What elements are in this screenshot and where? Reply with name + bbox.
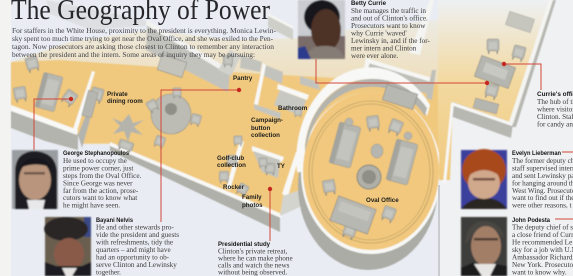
intro text: sky spent too much time trying to get near the Oval Office, and she was exiled to the Pen- xyxy=(12,35,274,43)
walls: Currie's office xyxy=(443,0,556,183)
text: Evelyn Lieberman xyxy=(512,150,573,210)
text: Bayani Nelvis: had an opportunity to ob- xyxy=(96,254,170,262)
photo: Evelyn Lieberman xyxy=(461,149,507,209)
intro text xyxy=(12,27,277,59)
text: George Stephanopoulos: Since George was never xyxy=(63,180,133,188)
Currie's office furniture xyxy=(473,11,535,114)
dining table and plant xyxy=(112,88,242,153)
text: Presidential study xyxy=(218,241,293,276)
text: Betty Currie: were ever alone. xyxy=(351,52,398,60)
photo: John Podesta xyxy=(461,217,507,276)
text: George Stephanopoulos xyxy=(63,150,142,210)
rug xyxy=(357,165,381,189)
text: Evelyn Lieberman: Evelyn Lieberman xyxy=(512,150,561,157)
intro text: For staffers in the White House, proximity to the president is everything. Monica Lewin- xyxy=(12,27,277,35)
text: George Stephanopoulos: George Stephanopoulos xyxy=(63,150,129,157)
text: Betty Currie: Lewinsky in, and if the for- xyxy=(351,37,431,45)
callout dots xyxy=(69,62,506,191)
text: Currie's office xyxy=(537,91,573,128)
wall: private dining room lower xyxy=(11,71,95,150)
text: Presidential study: calls and watch the news xyxy=(218,262,290,270)
photo: Betty Currie xyxy=(298,0,345,59)
wall: lower diagonal xyxy=(110,142,282,232)
Oval Office xyxy=(296,67,441,270)
text: George Stephanopoulos: steps from the Oval Office. xyxy=(63,172,142,180)
upper wall xyxy=(296,67,430,172)
text: Bayani Nelvis: He and other stewards pro- xyxy=(96,224,174,232)
text: Betty Currie: Prosecutors want to know xyxy=(351,22,426,30)
room labels: Campaign- xyxy=(251,117,283,124)
text: Bayani Nelvis: quarters – and might have xyxy=(96,246,171,254)
text: Evelyn Lieberman: and sent Lewinsky pa xyxy=(512,172,573,180)
photo: Bayani Nelvis xyxy=(44,217,91,276)
outer shadow crescent xyxy=(298,172,438,270)
text: Bayani Nelvis: Bayani Nelvis xyxy=(96,217,133,224)
walls: pantry, bathroom, closets xyxy=(226,0,436,218)
room labels: collection xyxy=(217,162,246,169)
text: John Podesta: John Podesta xyxy=(512,217,550,224)
room labels: Pantry xyxy=(233,75,253,82)
intro text: between the president and the intern. Some areas of inquiry they may be pursuing: xyxy=(12,51,255,59)
text: Bayani Nelvis xyxy=(96,217,179,276)
text: George Stephanopoulos: prime power corner, just xyxy=(63,164,133,172)
room labels: Oval Office xyxy=(366,197,399,204)
text: George Stephanopoulos: cutors want to know what xyxy=(63,194,137,202)
text: Betty Currie xyxy=(351,0,431,60)
room labels: Golf-club xyxy=(217,155,244,162)
text: Bayani Nelvis: vide the president and guests xyxy=(96,231,179,239)
credenza and small furniture xyxy=(157,54,302,198)
text: Betty Currie: why Currie 'waved' xyxy=(351,30,407,38)
walls: upper left xyxy=(46,0,293,92)
text: John Podesta: He recommended Le xyxy=(512,238,572,246)
room labels: Rocker xyxy=(223,184,245,191)
room labels: dining room xyxy=(107,98,143,105)
text: Presidential study: Clinton's private retreat, xyxy=(218,248,288,256)
text: Presidential study: Presidential study xyxy=(218,241,270,248)
room labels xyxy=(107,75,399,209)
Resolute desk xyxy=(330,196,376,234)
text: Bayani Nelvis: with refreshments, tidy the xyxy=(96,238,173,246)
text: George Stephanopoulos: he might have seen. xyxy=(63,202,120,210)
text: John Podesta: Ambassador Richardi xyxy=(512,254,573,262)
floor: west wing rooms xyxy=(11,20,439,216)
text: George Stephanopoulos: He used to occupy the xyxy=(63,157,127,165)
room labels: button xyxy=(251,125,270,132)
private dining room furniture xyxy=(13,56,104,118)
text: John Podesta: New York. Prosecuto xyxy=(512,261,573,269)
room labels: Private xyxy=(107,91,128,98)
intro text: tagon. Now prosecutors are asking those closest to Clinton to remember any interaction xyxy=(12,43,275,51)
console table xyxy=(382,84,418,110)
text: Betty Currie: mer intern and Clinton xyxy=(351,44,417,52)
text: Betty Currie: and out of Clinton's office. xyxy=(351,14,428,22)
text: Presidential study: where he can make phone xyxy=(218,254,293,262)
room labels: TY xyxy=(277,163,286,170)
text: John Podesta xyxy=(512,217,573,276)
photo: George Stephanopoulos xyxy=(12,150,58,209)
page gutter xyxy=(438,185,440,276)
text: Evelyn Lieberman: were other reasons, t xyxy=(512,202,571,210)
room labels: photos xyxy=(242,202,263,209)
text: George Stephanopoulos: far from the action, prose- xyxy=(63,187,139,195)
room labels: Bathroom xyxy=(278,105,308,112)
floor: Currie's office xyxy=(438,0,553,180)
room labels: collection xyxy=(251,132,280,139)
room labels: Family xyxy=(242,194,262,201)
callout lines xyxy=(34,59,573,241)
text: Evelyn Lieberman: for hanging around th xyxy=(512,180,573,188)
lower white wall xyxy=(301,92,441,254)
text: Betty Currie: Betty Currie xyxy=(351,0,386,7)
text: Betty Currie: She manages the traffic in xyxy=(351,7,426,15)
text: Bayani Nelvis: serve Clinton and Lewinsky xyxy=(96,261,177,269)
